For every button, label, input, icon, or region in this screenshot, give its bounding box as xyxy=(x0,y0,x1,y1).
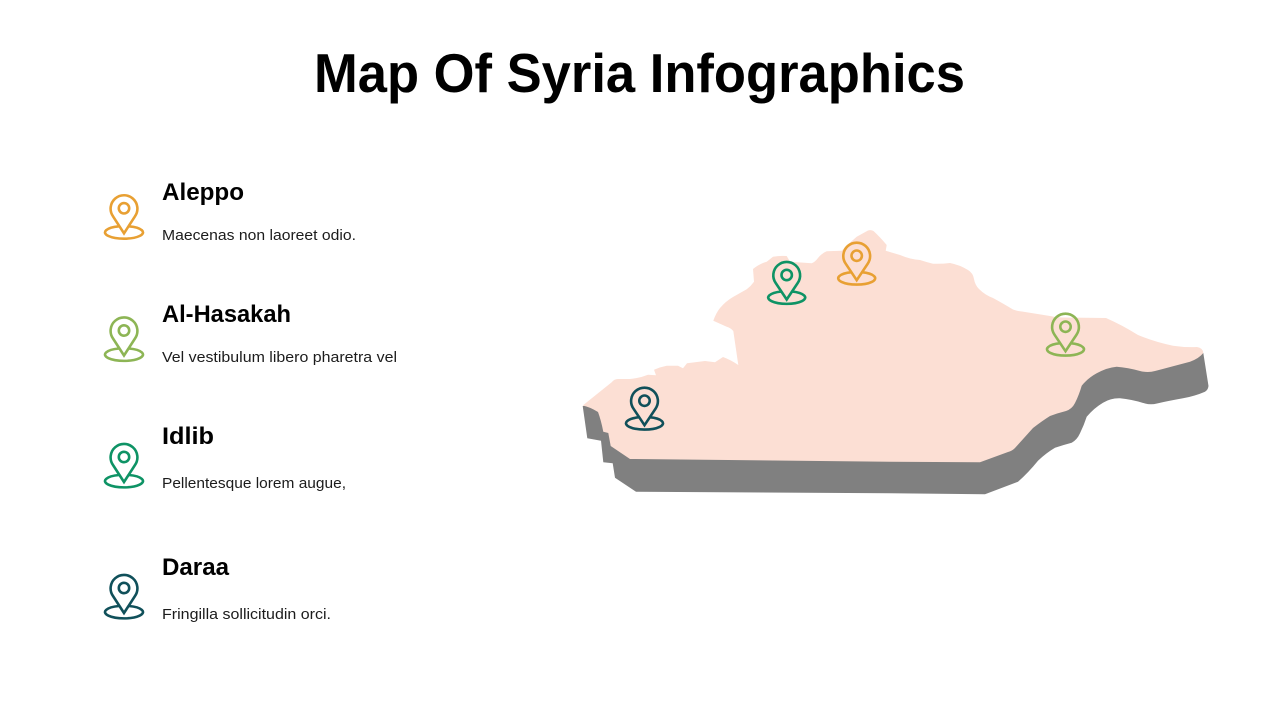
description: Daraa: Fringilla sollicitudin orci. xyxy=(162,607,331,623)
description: Aleppo: Maecenas non laoreet odio. xyxy=(162,228,356,244)
icon: light green location pin xyxy=(105,317,143,361)
map pin: Daraa xyxy=(626,388,663,430)
heading: Al-Hasakah: Al-Hasakah xyxy=(162,301,291,328)
map pin: Aleppo xyxy=(838,243,875,285)
map side: grey extrusion xyxy=(583,353,1208,494)
description: Al-Hasakah: Vel vestibulum libero pharetra vel xyxy=(162,350,397,366)
map top: pink country shape xyxy=(583,230,1203,462)
icon: green location pin xyxy=(105,444,143,487)
heading: Aleppo: Aleppo xyxy=(162,179,244,206)
legend item: Daraa xyxy=(105,554,331,623)
heading: Daraa: Daraa xyxy=(162,554,230,581)
legend item: Aleppo xyxy=(105,179,356,244)
map of Syria xyxy=(583,230,1208,494)
legend item: Idlib xyxy=(105,423,346,492)
title: Map Of Syria Infographics xyxy=(314,42,965,104)
icon: dark teal location pin xyxy=(105,575,143,618)
icon: orange location pin xyxy=(105,195,143,239)
legend item: Al-Hasakah xyxy=(105,301,397,366)
map pin: Idlib xyxy=(768,262,805,304)
heading: Idlib: Idlib xyxy=(162,423,214,450)
description: Idlib: Pellentesque lorem augue, xyxy=(162,476,346,492)
map pin: Al-Hasakah xyxy=(1047,314,1084,356)
